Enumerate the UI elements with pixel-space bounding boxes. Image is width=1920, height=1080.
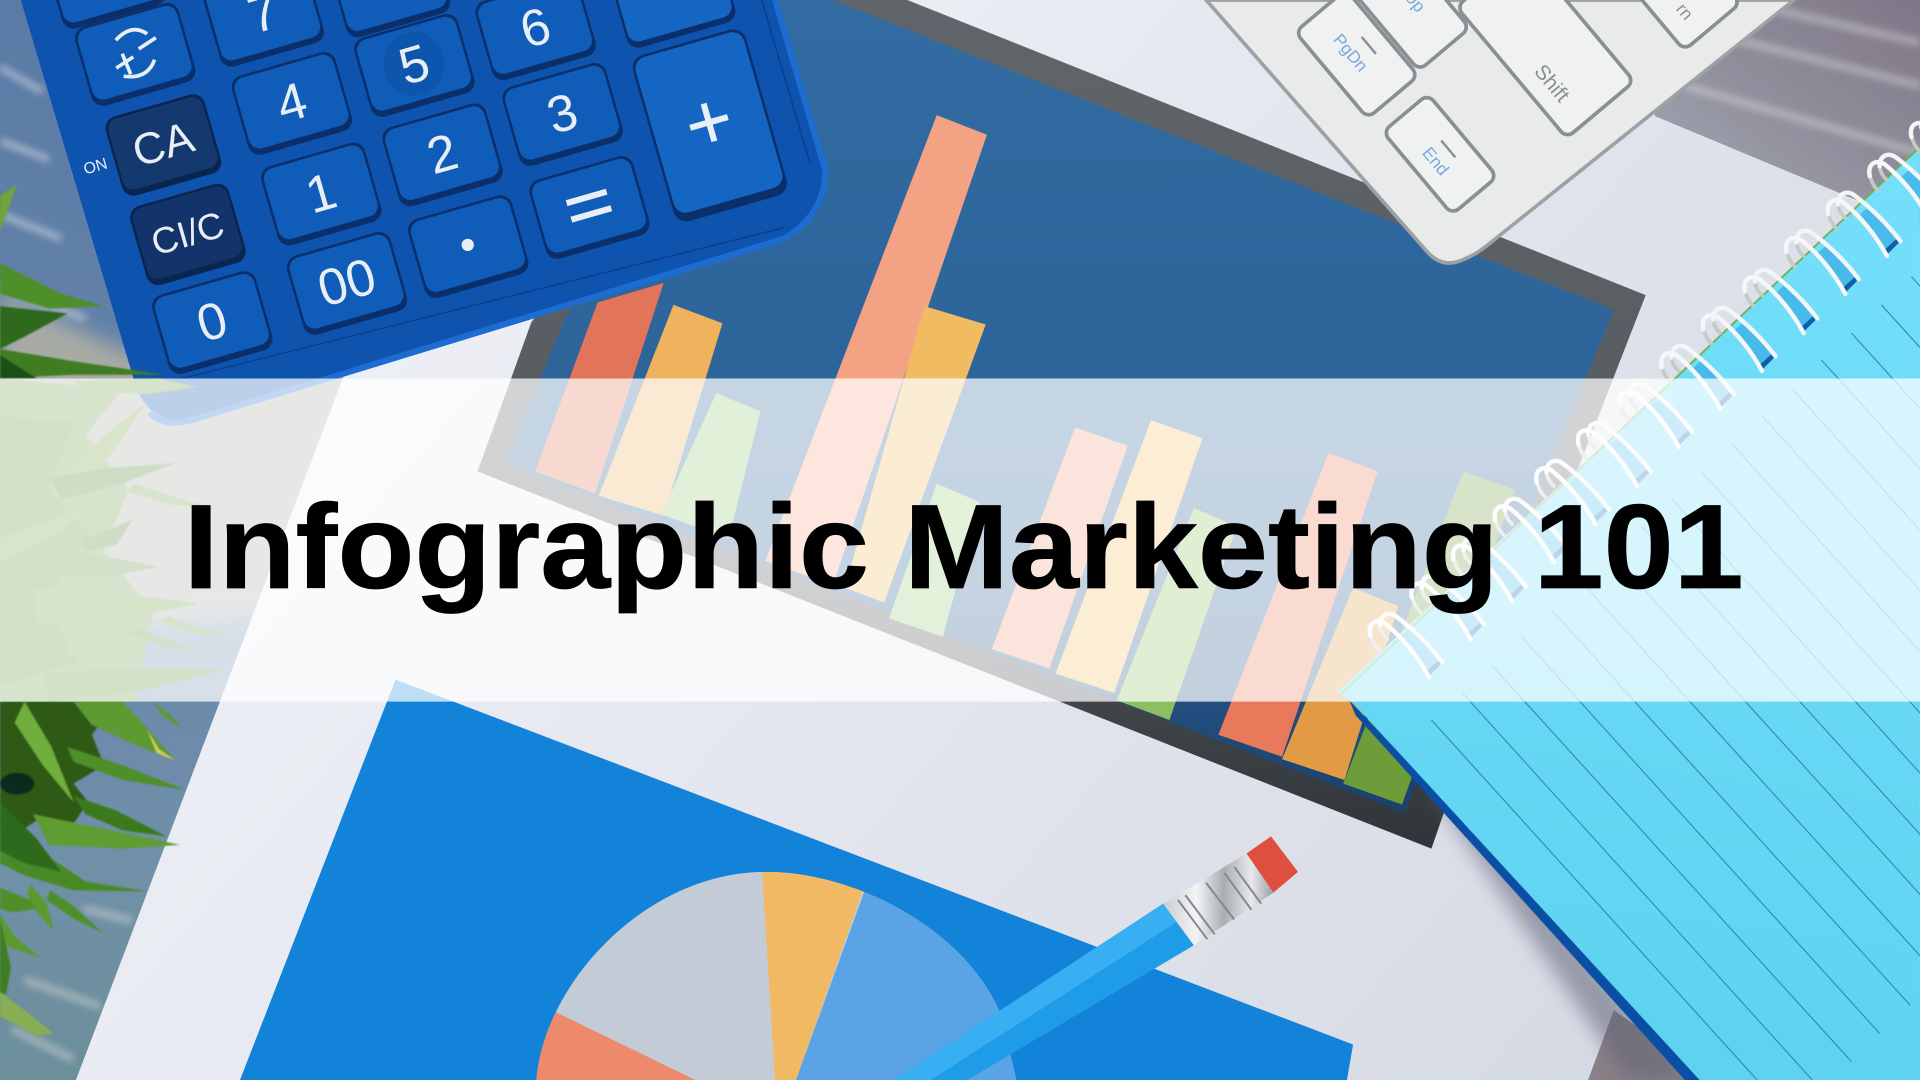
chart blue background [506,0,1614,813]
key: minus [607,0,738,51]
plant leaves [0,184,227,1036]
PgDn key: PgDn [1329,30,1372,75]
Shift key: Shift [1530,60,1574,107]
Enter key [1602,0,1740,50]
spiral binding rings [1370,116,1920,677]
bar chart poster [478,0,1646,849]
key: equals [526,153,653,262]
key: top-left [43,0,169,32]
lower leaves [0,702,185,1036]
upper leaves [0,184,165,378]
key: swap [72,0,198,109]
key: 3 [499,60,626,169]
spine edge line [1341,147,1920,694]
key: plus [630,26,790,225]
PgDn key [1295,0,1418,118]
End key: End [1418,143,1453,179]
notebook [1337,116,1920,1080]
key: CI/C [127,181,249,288]
calculator body [21,0,825,420]
bars group 1 [535,283,760,539]
pie chart [536,872,1016,1080]
key: 0 [149,268,275,377]
Shift key [1456,0,1634,138]
key: 1 [258,140,384,248]
bars group 3 [992,420,1237,720]
key: 1: 1 [299,161,343,224]
key: 0: 0 [190,289,234,353]
key: CA: CA [127,112,200,177]
End key [1383,94,1497,214]
key: 8 [327,0,453,40]
key: 00 [284,229,410,338]
bars group 2 [765,115,987,637]
title: Infographic Marketing 101 [184,480,1744,614]
key: 6 [473,0,599,83]
icon: pencil [894,836,1298,1080]
bars group 4 [1218,453,1515,804]
key: 5: 5 [392,32,436,96]
leaves behind title band [0,378,227,702]
ON label: ON [82,155,109,178]
key: 5 [351,11,477,120]
key: decimal point [405,192,531,301]
notebook shadow on paper [1427,784,1690,1080]
key: 4 [229,49,355,158]
key: 3: 3 [540,81,584,145]
keyboard [1206,0,1794,263]
key: CI/C: CI/C [147,204,229,263]
key: 00: 00 [311,246,382,318]
notebook page [1337,147,1920,1080]
chart frame [478,0,1646,849]
blue pie chart sheet [240,680,1353,1080]
key: 2: 2 [420,122,464,185]
ruled lines [1431,277,1920,1080]
calculator [21,0,825,423]
key: CA [103,91,224,199]
key: 7 [201,0,327,70]
key: 2 [379,101,506,209]
PgUp key [1347,0,1470,71]
notebook side edge [1349,700,1709,1080]
key: 4: 4 [270,70,313,134]
translucent title band [0,378,1920,702]
